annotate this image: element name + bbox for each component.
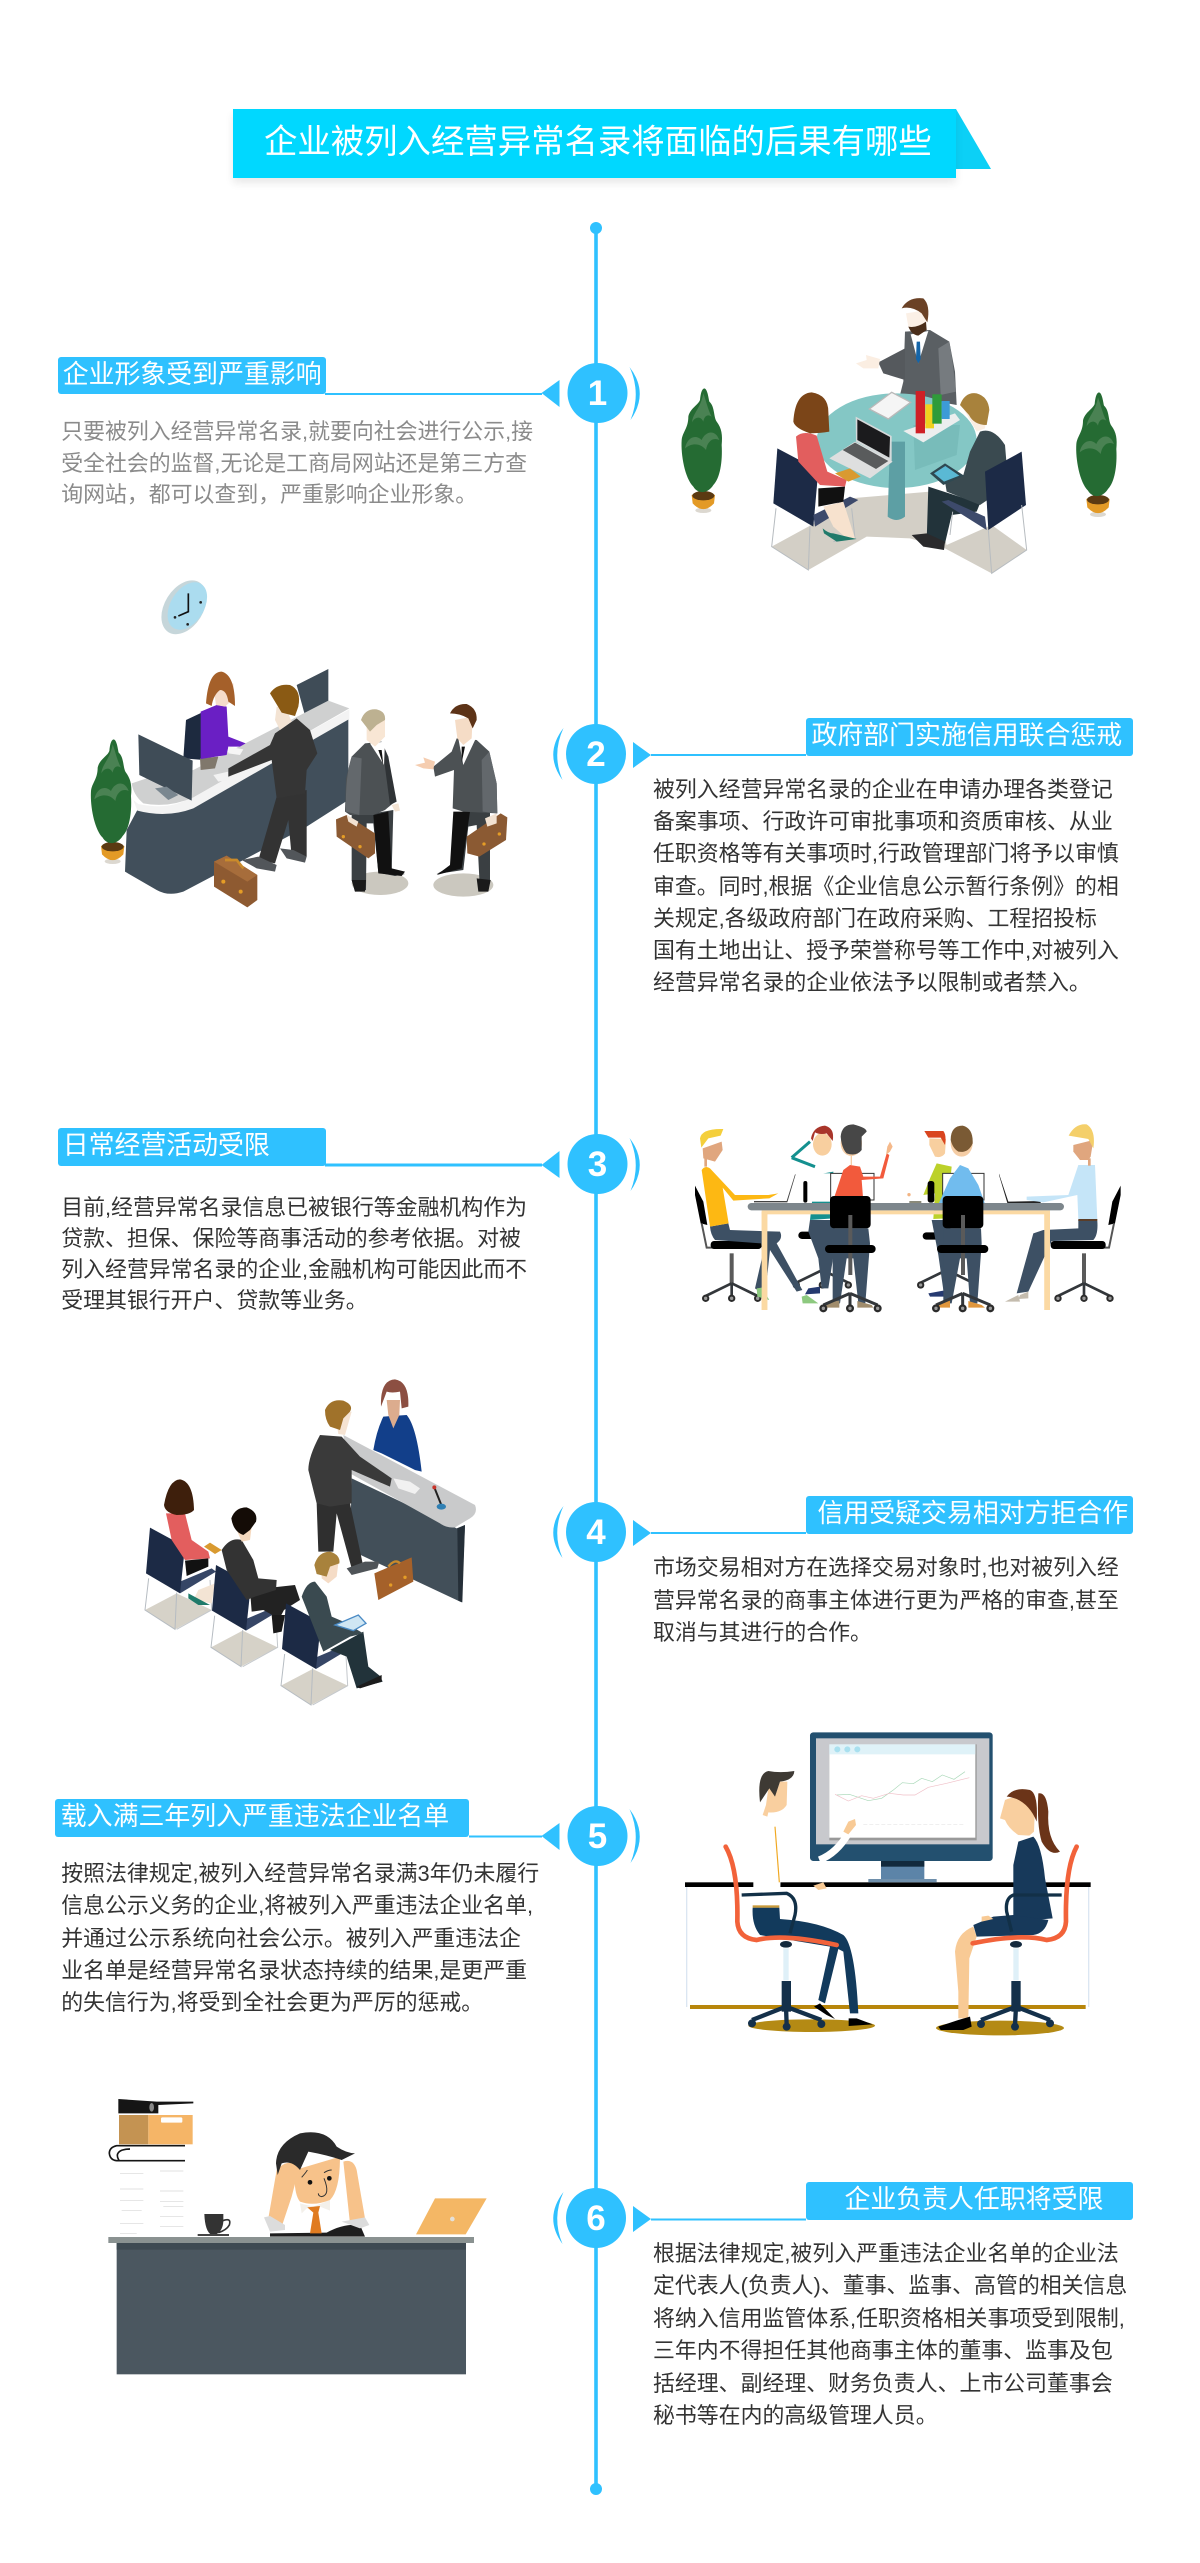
text block 5: 按照法律规定,被列入经营异常名录满3年仍未履行	[61, 1861, 539, 1886]
text block 4: 市场交易相对方在选择交易对象时,也对被列入经	[653, 1555, 1119, 1580]
heading 2	[806, 718, 1133, 756]
icon: plant	[91, 739, 131, 864]
node 3: 3	[588, 1145, 607, 1184]
text block 2: 经营异常名录的企业依法予以限制或者禁入。	[653, 970, 1091, 995]
front chair right	[932, 1196, 994, 1312]
panel: 日常经营活动受限	[58, 1128, 527, 1312]
node 3	[325, 1134, 640, 1194]
text block 2	[653, 777, 1119, 995]
table	[748, 1174, 1064, 1310]
heading 6: 企业负责人任职将受限	[844, 2186, 1103, 2214]
heading 3	[58, 1128, 326, 1166]
heading 2: 政府部门实施信用联合惩戒	[812, 722, 1122, 750]
node 2	[553, 724, 806, 784]
back left person	[792, 1126, 852, 1294]
node 1	[325, 363, 640, 423]
text block 3: 目前,经营异常名录信息已被银行等金融机构作为	[61, 1194, 527, 1220]
waiting man	[211, 1507, 300, 1667]
node 4	[553, 1502, 806, 1562]
woman behind counter	[373, 1379, 422, 1472]
icon: left plant	[682, 388, 722, 513]
text block 2: 备案事项、行政许可审批事项和资质审核、从业	[653, 809, 1113, 834]
icon: stack of files	[109, 2099, 193, 2233]
title	[233, 109, 956, 178]
waiting man with tablet	[281, 1552, 383, 1705]
node 1: 1	[588, 374, 607, 413]
node 6: 6	[586, 2199, 606, 2238]
heading 6	[806, 2182, 1133, 2220]
left person	[695, 1129, 818, 1310]
woman with chair	[938, 1789, 1077, 2031]
node 6	[553, 2188, 806, 2248]
text block 3: 列入经营异常名录的企业,金融机构可能因此而不	[61, 1256, 527, 1282]
title: 企业被列入经营异常名录将面临的后果有哪些	[264, 124, 932, 161]
text block 5: 并通过公示系统向社会公示。被列入严重违法企	[61, 1926, 521, 1950]
text block 3	[61, 1194, 527, 1312]
front chair left	[819, 1196, 882, 1312]
icon: right plant	[1076, 392, 1117, 517]
illustration: team around long table	[695, 1124, 1121, 1312]
text block 6: 定代表人(负责人)、董事、监事、高管的相关信息	[653, 2273, 1127, 2298]
text block 2: 审查。同时,根据《企业信息公示暂行条例》的相	[653, 874, 1119, 899]
desk and floor	[685, 1882, 1091, 2035]
title banner fold	[956, 109, 991, 169]
panel: 信用受疑交易相对方拒合作	[653, 1496, 1133, 1645]
heading 4: 信用受疑交易相对方拒合作	[818, 1500, 1128, 1528]
node 4: 4	[586, 1513, 606, 1552]
illustration: round table meeting	[682, 298, 1117, 573]
text block 5	[61, 1861, 539, 2015]
right person	[1005, 1124, 1121, 1310]
back right person	[917, 1131, 976, 1297]
text block 1: 询网站，都可以查到，严重影响企业形象。	[61, 482, 477, 507]
illustration: reception desk	[91, 572, 507, 907]
icon: laptop	[416, 2198, 487, 2234]
icon: coffee cup	[198, 2214, 230, 2236]
text block 3: 贷款、担保、保险等商事活动的参考依据。对被	[61, 1226, 521, 1250]
counter	[343, 1435, 476, 1602]
text block 4: 取消与其进行的合作。	[653, 1620, 872, 1645]
briefcase	[374, 1557, 413, 1600]
waiting woman	[145, 1479, 222, 1629]
node 2: 2	[586, 735, 606, 774]
panel: 企业负责人任职将受限	[653, 2182, 1133, 2428]
text block 4: 营异常名录的商事主体进行更为严格的审查,甚至	[653, 1588, 1119, 1612]
text block 1: 只要被列入经营异常名录,就要向社会进行公示,接	[61, 419, 533, 444]
text block 2: 国有土地出让、授予荣誉称号等工作中,对被列入	[653, 938, 1119, 963]
text block 1	[61, 419, 533, 507]
worried man	[264, 2132, 369, 2237]
text block 6: 三年内不得担任其他商事主体的董事、监事及包	[653, 2338, 1113, 2363]
man with chair	[726, 1771, 873, 2031]
icon: briefcase on floor	[214, 856, 257, 907]
timeline vertical line	[590, 222, 602, 2495]
text block 5: 业名单是经营异常名录状态持续的结果,是更严重	[61, 1958, 527, 1983]
heading 4	[806, 1496, 1133, 1534]
text block 1: 受全社会的监督,无论是工商局网站还是第三方查	[61, 450, 527, 476]
desk	[108, 2237, 474, 2374]
text block 5: 的失信行为,将受到全社会更为严厉的惩戒。	[61, 1990, 483, 2015]
text block 2: 关规定,各级政府部门在政府采购、工程招投标	[653, 906, 1097, 931]
heading 1: 企业形象受到严重影响	[63, 361, 322, 389]
heading 3: 日常经营活动受限	[63, 1132, 270, 1160]
front left person	[831, 1124, 893, 1205]
text block 6: 将纳入信用监管体系,任职资格相关事项受到限制,	[653, 2306, 1125, 2331]
man at counter	[308, 1400, 420, 1575]
illustration: presentation at monitor	[685, 1732, 1091, 2035]
text block 5: 信息公示义务的企业,将被列入严重违法企业名单,	[61, 1893, 533, 1918]
heading 5: 载入满三年列入严重违法企业名单	[61, 1803, 449, 1831]
node 5	[469, 1806, 640, 1866]
front right person	[937, 1126, 986, 1207]
icon: briefcase man 2	[336, 815, 375, 858]
panel: 载入满三年列入严重违法企业名单	[55, 1799, 539, 2015]
text block 6: 括经理、副经理、财务负责人、上市公司董事会	[653, 2371, 1113, 2396]
panel: 政府部门实施信用联合惩戒	[653, 718, 1133, 995]
text block 6	[653, 2241, 1127, 2428]
text block 3: 受理其银行开户、贷款等业务。	[61, 1288, 368, 1312]
text block 6: 根据法律规定,被列入严重违法企业名单的企业法	[653, 2241, 1119, 2266]
node 5: 5	[588, 1817, 607, 1856]
text block 2: 任职资格等有关事项时,行政管理部门将予以审慎	[653, 841, 1119, 866]
text block 4	[653, 1555, 1119, 1645]
text block 2: 被列入经营异常名录的企业在申请办理各类登记	[653, 777, 1113, 802]
text block 6: 秘书等在内的高级管理人员。	[653, 2403, 938, 2428]
illustration: queue at service counter	[145, 1379, 476, 1705]
icon: wall clock	[152, 572, 216, 642]
icon: monitor with chart	[810, 1732, 993, 1882]
heading 5	[55, 1799, 469, 1837]
illustration: worried manager at desk	[108, 2099, 487, 2374]
panel: 企业形象受到严重影响	[58, 357, 533, 507]
icon: briefcase man 3	[467, 813, 507, 857]
